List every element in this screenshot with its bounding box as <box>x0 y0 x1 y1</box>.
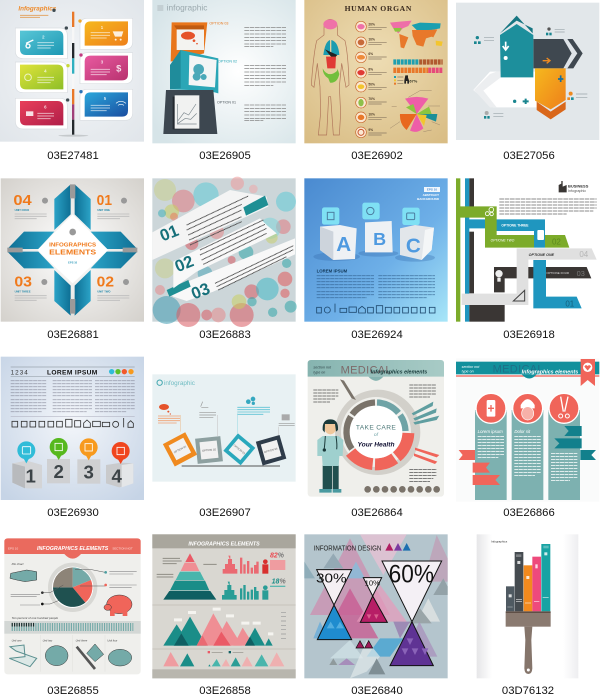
cube shadows <box>313 250 435 262</box>
header: 1234 <box>11 369 29 376</box>
header: type on <box>462 370 474 374</box>
option three: OPTIONE THREE <box>501 223 529 227</box>
header tag: ABSTRACT <box>423 193 439 197</box>
icon row <box>12 418 133 427</box>
label: 03E26918: 03E26918 <box>503 329 555 341</box>
heading: EPS 10 <box>68 260 78 264</box>
pencil top-left <box>340 379 356 400</box>
text blocks <box>313 385 437 481</box>
panel: 03E26858 triangle charts <box>152 534 296 678</box>
unit 01: UNIT ONE <box>97 208 110 212</box>
icons row <box>9 635 132 672</box>
arrow: dark right <box>533 39 583 68</box>
header: Infographics elements <box>371 370 427 376</box>
small triangles <box>356 641 373 648</box>
triangle: 30% <box>316 570 352 640</box>
unit 04: UNIT FOUR <box>15 208 29 212</box>
heading: infographics: Infographics <box>18 6 57 13</box>
organ percentages: 50% <box>368 83 375 87</box>
label: 03E26905: 03E26905 <box>199 150 251 162</box>
frame: teal <box>223 433 255 465</box>
card text: $ <box>116 63 122 73</box>
heading: INFOGRAPHICS <box>49 242 97 248</box>
ribbon: dark <box>493 267 591 292</box>
option labels <box>209 21 237 104</box>
organ percentages: 20% <box>368 23 375 27</box>
unit 04 <box>13 193 48 219</box>
frame: grey: OPTION 02 <box>202 447 217 453</box>
icons row: Unit three <box>76 638 88 642</box>
panel: 03D76132 paintbrush <box>477 534 578 678</box>
cube A: A <box>336 233 351 256</box>
panel: 03E26918 business ribbons: OPTIONE FOUR <box>546 271 570 275</box>
label: 03D76132: 03D76132 <box>502 685 554 697</box>
pencils right red <box>414 448 439 464</box>
center text: of <box>374 432 379 438</box>
ribbon: blue top <box>465 219 545 248</box>
header: EPS 10 <box>8 546 18 550</box>
card: key <box>20 31 63 55</box>
center text: Your Health <box>357 441 395 448</box>
header: type on <box>313 370 325 374</box>
triangle: 60%: 60% <box>389 560 434 588</box>
heading <box>49 242 97 264</box>
hand icon <box>10 570 37 582</box>
arrow: teal up <box>500 16 533 77</box>
column 2: Dolor sit <box>514 429 531 434</box>
text columns <box>11 381 135 412</box>
pencils right teal <box>412 402 439 425</box>
panel: 03E26918 business ribbons: 04 <box>579 250 589 259</box>
background circles <box>153 177 297 327</box>
pie chart <box>11 563 137 612</box>
callouts <box>158 397 295 436</box>
unit 02: 02 <box>97 275 114 291</box>
heading: business infographic <box>559 181 589 193</box>
body text <box>244 27 286 121</box>
cube A <box>320 207 357 260</box>
percent callout <box>394 75 418 85</box>
legend <box>208 651 243 653</box>
header: section not <box>462 365 480 369</box>
cards frames <box>15 18 133 129</box>
header <box>4 538 141 559</box>
organ percentages: 6% <box>368 52 373 56</box>
panel: 03E26855 pie and piggy <box>4 538 141 674</box>
ribbon 2 <box>173 218 277 288</box>
cube B: B <box>373 229 386 249</box>
panel: 03E26902 human organ <box>304 0 448 143</box>
bristle bars <box>506 544 550 611</box>
percent 18: 18% <box>272 578 286 585</box>
heading: ELEMENTS <box>49 247 96 256</box>
triangle: 60% <box>382 560 442 666</box>
header <box>152 534 296 548</box>
header tag: BACKGROUND <box>417 197 440 201</box>
unit 01: 01 <box>97 193 112 209</box>
organ percentages <box>368 23 375 132</box>
vertical bars <box>456 178 505 322</box>
label: 03E26866: 03E26866 <box>503 507 555 519</box>
organ percentages: 10% <box>368 38 375 42</box>
blue folded arms <box>7 184 137 316</box>
center text <box>356 425 396 448</box>
cube 3: 3 <box>83 461 94 482</box>
frame: grey <box>195 436 223 464</box>
header: MEDICAL <box>493 364 544 376</box>
cube 2 <box>47 438 70 483</box>
header <box>11 367 135 377</box>
callouts <box>474 27 587 119</box>
heading: Infographics <box>491 539 508 543</box>
label: 03E26881: 03E26881 <box>47 329 99 341</box>
cake and bars red <box>223 556 285 574</box>
bookmark with heart <box>581 359 595 386</box>
cube 2: 2 <box>53 461 64 482</box>
arrow: orange down <box>535 68 566 119</box>
panel: 03E26840 information design <box>304 534 448 678</box>
icon row <box>364 486 440 493</box>
panel: 03E26918 business ribbons: 02 <box>552 238 561 247</box>
heading: information design: INFORMATION DESIGN <box>314 546 381 553</box>
cube 4: 4 <box>111 466 122 487</box>
frame: orange <box>163 432 197 466</box>
card text: 1 <box>101 25 104 30</box>
panel: 03E26918 business ribbons <box>456 178 599 322</box>
center diamond <box>37 214 108 283</box>
panel: 03E26918 business ribbons: OPTIONE ONE <box>529 253 555 257</box>
card: camera <box>20 101 63 125</box>
icons row: Unit two <box>43 638 53 642</box>
label: 03E26930: 03E26930 <box>47 507 99 519</box>
organ percentages: 10% <box>368 113 375 117</box>
heading triangles <box>385 543 411 551</box>
option labels: OPTION 01 <box>217 100 236 104</box>
world map <box>390 21 443 48</box>
cube 4 <box>106 442 133 487</box>
doctor figure <box>317 419 343 493</box>
background triangles <box>304 534 448 678</box>
organ percentages: 8% <box>368 68 373 72</box>
piggy bank <box>104 595 132 616</box>
column 2 <box>512 393 543 500</box>
card: wifi <box>85 92 128 117</box>
cube 3 <box>77 438 100 484</box>
label: 03E26855: 03E26855 <box>47 685 99 697</box>
ribbons teal <box>554 426 596 460</box>
option two: OPTIONE TWO <box>491 239 515 243</box>
triangle: 10% <box>360 578 387 622</box>
ribbon numbers: 03 <box>188 279 213 303</box>
cube 1: 1 <box>25 466 36 487</box>
organ percentages: 70% <box>368 97 375 101</box>
icons row: Unit one <box>12 638 22 642</box>
label: 03E26883: 03E26883 <box>199 329 251 341</box>
panel: 03E26905 stacked boxes <box>152 0 296 143</box>
cube C: C <box>406 234 421 257</box>
body text <box>317 276 435 298</box>
brush handle <box>524 627 532 674</box>
panel: 03E26881 infographics elements <box>1 178 144 322</box>
bottom triangles <box>163 652 284 666</box>
header: Infographics elements <box>522 370 578 376</box>
ribbon numbers: 01 <box>157 221 181 245</box>
header: INFOGRAPHICS ELEMENTS <box>188 542 260 548</box>
ribbon: grey option one <box>462 248 597 305</box>
unit 03 <box>14 275 47 300</box>
frame: dark <box>256 435 286 465</box>
panel: 03E26866 medical columns <box>456 358 599 502</box>
ground line <box>182 464 280 467</box>
pie chart <box>390 91 440 132</box>
ribbon 3 <box>167 238 295 301</box>
organ list <box>356 21 366 138</box>
card: target <box>20 65 63 89</box>
heading: human organ: HUMAN ORGAN <box>345 4 412 13</box>
label: 03E26864: 03E26864 <box>351 507 403 519</box>
card text: 4 <box>44 69 47 74</box>
pyramid <box>163 553 216 600</box>
label: 03E26858: 03E26858 <box>199 685 251 697</box>
cube B <box>362 203 393 252</box>
ribbons red <box>459 450 500 485</box>
box: orange <box>171 22 207 62</box>
ribbon 1 <box>152 190 268 260</box>
people counter: Ten percent of one hundred people <box>12 616 58 620</box>
heading: infographic: infographic <box>164 380 195 387</box>
ribbon numbers: 02 <box>172 251 196 276</box>
cube C <box>400 208 434 260</box>
triangle: 10%: 10% <box>365 579 380 588</box>
icon row <box>317 304 435 313</box>
footer band <box>152 669 296 678</box>
frame: dark: OPTION 04 <box>264 446 278 454</box>
card text <box>42 25 122 109</box>
header: MEDICAL <box>341 364 392 376</box>
central timeline stem <box>58 12 88 137</box>
column 1: Lorem ipsum <box>478 429 503 434</box>
header tag: EPS 10 <box>427 188 437 192</box>
option labels: OPTION 02 <box>218 60 237 64</box>
panel: 03E26924 abc cubes <box>304 178 448 322</box>
card text: 5 <box>104 96 107 101</box>
ring chart <box>335 390 420 475</box>
intro text <box>499 199 597 214</box>
panel: 03E27056 arrows <box>456 3 599 140</box>
unit 02 <box>97 275 129 300</box>
frame: teal: OPTION 03 <box>233 443 246 456</box>
unit 03: 03 <box>14 275 32 291</box>
header tag <box>417 187 440 201</box>
panel: 03E27481 step cards <box>0 0 144 142</box>
percent callout: 67% <box>409 78 418 83</box>
label: 03E26902: 03E26902 <box>351 150 403 162</box>
header <box>456 362 599 378</box>
heading: business infographic: Infographic <box>568 189 586 193</box>
card text: 6 <box>44 104 47 109</box>
label: 03E27056: 03E27056 <box>503 150 555 162</box>
header: INFOGRAPHICS ELEMENTS <box>37 546 109 552</box>
panel: 03E26907 tilted frames <box>152 374 296 482</box>
unit 03: UNIT THREE <box>15 289 31 293</box>
header: section not <box>313 366 332 370</box>
ribbon: green <box>456 206 534 248</box>
column 3 <box>548 393 580 500</box>
heading: lorem ipsum: LOREM IPSUM <box>317 268 348 273</box>
box: dark <box>163 90 217 134</box>
ribbon numbers <box>157 221 213 303</box>
cube 1 <box>12 441 42 488</box>
cake and bars teal <box>222 582 285 600</box>
card: money <box>85 56 128 80</box>
organ percentages: 9% <box>368 128 373 132</box>
pyramid notes <box>157 558 217 577</box>
pie chart caption: Pie chart <box>12 562 24 566</box>
card text: 3 <box>101 59 104 64</box>
ribbon: teal bottom <box>533 260 582 308</box>
frame: orange: OPTION 01 <box>173 444 188 454</box>
card text: 2 <box>42 34 45 39</box>
heading: business infographic: BUSINESS <box>568 183 589 188</box>
arrow: white left <box>473 72 537 107</box>
header: LOREM IPSUM <box>47 370 98 377</box>
icons row: Unit four <box>107 638 117 642</box>
bar marks <box>507 546 549 607</box>
triangle: 30%: 30% <box>316 570 347 585</box>
label: 03E26840: 03E26840 <box>351 685 403 697</box>
percent 82: 82% <box>270 552 285 559</box>
mountain chart <box>163 608 286 646</box>
label: 03E26907: 03E26907 <box>199 507 251 519</box>
body figure <box>311 19 349 135</box>
icons <box>485 207 544 301</box>
card: shopping <box>85 21 128 46</box>
header <box>308 360 444 381</box>
label: 03E27481: 03E27481 <box>47 150 99 162</box>
column 1 <box>475 393 507 500</box>
panel: 03E26918 business ribbons: 03 <box>577 269 585 278</box>
option labels: OPTION 03 <box>209 21 228 25</box>
panel: 03E26918 business ribbons: 01 <box>565 300 575 309</box>
pictogram rows <box>393 54 419 70</box>
panel: 03E26883 ribbons and circles <box>152 177 297 327</box>
box: teal <box>170 50 218 93</box>
heading: infographic: infographic <box>167 2 207 12</box>
panel: 03E26930 lorem ipsum cubes <box>1 357 144 500</box>
unit 04: 04 <box>13 193 33 209</box>
center text: TAKE CARE <box>356 425 396 432</box>
unit 02: UNIT TWO <box>97 289 110 293</box>
label: 03E26924: 03E26924 <box>351 329 403 341</box>
brush ferrule <box>506 611 551 627</box>
panel: 03E26864 medical take care <box>308 360 444 497</box>
unit 01 <box>97 193 129 219</box>
header: SECTION NOT <box>112 546 133 550</box>
